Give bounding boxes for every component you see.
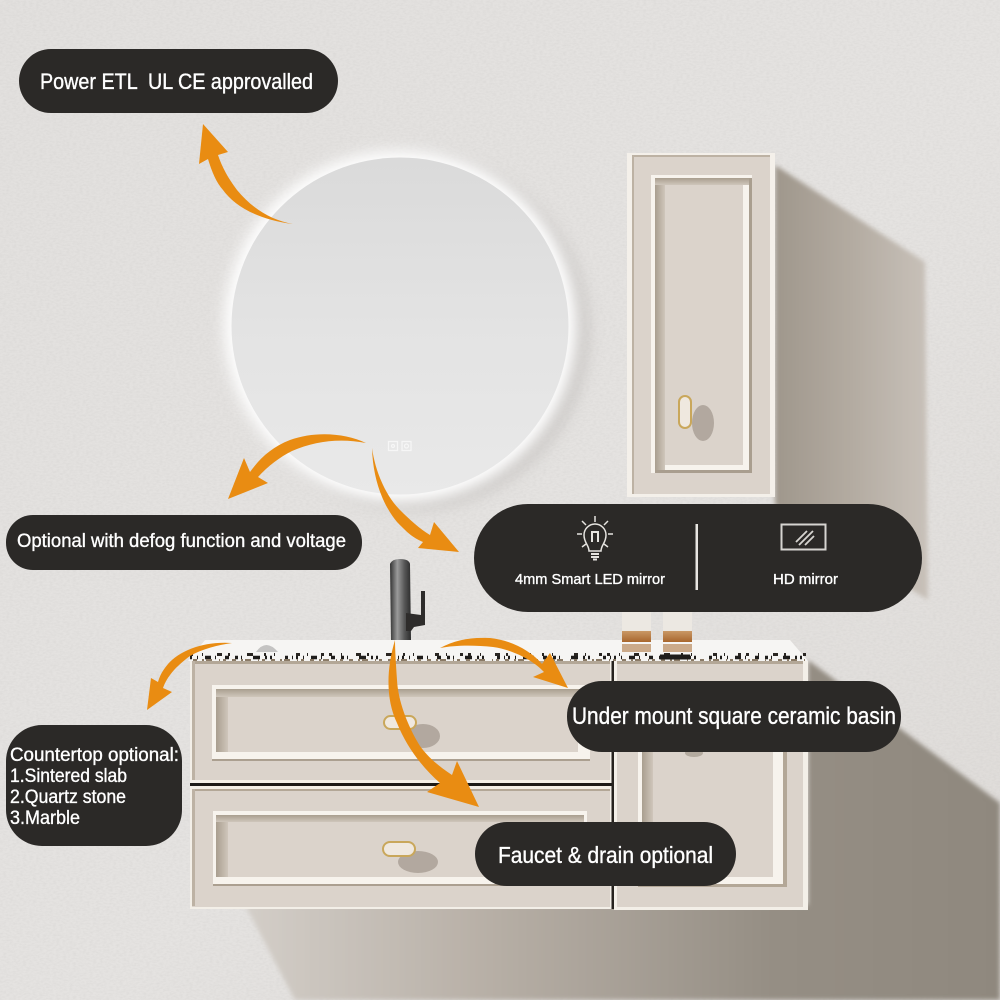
icon: hd glass (782, 524, 826, 550)
arrow: countertop (147, 643, 232, 710)
cabinet door panel (651, 175, 752, 473)
base door (614, 661, 808, 910)
label: certification: Power ETL UL CE approvalled (40, 69, 313, 94)
shadow: wall cabinet (775, 165, 928, 600)
mirror wall shadow (234, 154, 590, 510)
label: countertop options: Countertop optional: (10, 745, 179, 766)
mirror face (232, 158, 568, 494)
label: countertop options (6, 725, 182, 846)
drawer handle (384, 716, 416, 729)
cabinet gap (612, 661, 614, 909)
text: hd mirror: HD mirror (773, 572, 838, 588)
label: countertop options: 2.Quartz stone (10, 787, 126, 808)
vanity (188, 640, 808, 910)
drawer handle shadow (406, 724, 440, 748)
countertop (188, 640, 808, 661)
shadow: vanity (245, 660, 1000, 1000)
touch buttons (388, 442, 411, 450)
label: basin (567, 681, 901, 752)
mirror glow (224, 150, 576, 502)
wall cabinet (627, 153, 775, 497)
label: faucet (475, 822, 736, 886)
led mirror (224, 150, 590, 510)
drawer handle shadow (398, 851, 438, 873)
text: smart led: 4mm Smart LED mirror (515, 572, 665, 588)
label: countertop options: 1.Sintered slab (10, 766, 127, 787)
drawer gap (190, 783, 612, 786)
label: defog function (6, 515, 362, 570)
label: defog function: Optional with defog function and voltage (17, 530, 346, 552)
door handle shadow (685, 749, 703, 757)
handle shadow (692, 405, 714, 441)
label: faucet: Faucet & drain optional (498, 842, 713, 868)
cabinet body (627, 153, 775, 497)
arrow: power certification (199, 124, 293, 224)
basin edge (256, 645, 278, 652)
bottles (622, 612, 692, 652)
terrazzo edge (190, 654, 806, 660)
top drawer (190, 661, 612, 783)
label: countertop options: 3.Marble (10, 808, 80, 829)
arrow: faucet (388, 640, 479, 807)
arrow: basin (440, 638, 568, 688)
label: certification (19, 49, 338, 113)
label: basin: Under mount square ceramic basin (572, 703, 896, 730)
divider (696, 524, 698, 590)
icon: light bulb (577, 516, 613, 560)
faucet (390, 559, 425, 640)
arrow: led mirror (372, 448, 459, 552)
drawer handle (383, 842, 415, 856)
bottom drawer (190, 786, 612, 909)
panel: mirror features (474, 504, 922, 612)
cabinet handle (679, 396, 691, 428)
arrow: defog function (228, 434, 366, 499)
